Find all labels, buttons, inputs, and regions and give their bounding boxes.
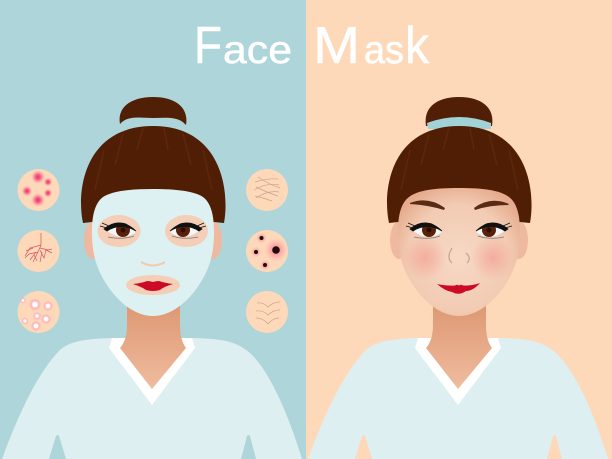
lip patch [126, 275, 180, 295]
eye left [100, 223, 136, 238]
eye left [406, 223, 442, 238]
skin problem: pimples [18, 169, 60, 211]
panel: woman without mask [308, 97, 608, 459]
blush [403, 236, 515, 280]
title: k [405, 17, 430, 75]
sleeve gap left [355, 435, 372, 459]
hair band [427, 117, 491, 129]
title: ace [223, 29, 292, 72]
skin problem: wrinkles [246, 291, 288, 333]
collar [415, 338, 501, 405]
neck [426, 300, 492, 389]
sleeve gap right [547, 435, 562, 459]
eye patches [98, 215, 208, 247]
skin problem: veins [18, 230, 60, 272]
skin problem: whiteheads [18, 291, 60, 333]
sleeve gap right [241, 435, 256, 459]
shirt [2, 338, 302, 459]
sleeve gap left [49, 435, 66, 459]
hair [387, 126, 532, 223]
face [398, 188, 520, 316]
shirt [308, 338, 608, 459]
nose [141, 262, 165, 266]
panel: peach background [306, 0, 612, 459]
skin problem: fine lines [246, 169, 288, 211]
title [194, 17, 430, 75]
hair bun [426, 97, 492, 126]
panel: blue background [0, 0, 306, 459]
eye right [476, 223, 512, 238]
collar [109, 338, 195, 405]
nose [449, 248, 469, 263]
skin problem: blackheads [246, 230, 288, 272]
mask [92, 189, 214, 316]
hair bun [120, 97, 186, 125]
eye right [170, 223, 206, 238]
lips [133, 281, 173, 291]
ears [390, 221, 528, 259]
ears [84, 221, 222, 259]
hair [81, 126, 226, 223]
neck [120, 300, 186, 389]
eyebrows [410, 200, 509, 210]
title: F [194, 17, 222, 75]
panel: woman with face mask [2, 97, 302, 459]
title: M [313, 17, 360, 75]
title: as [364, 29, 404, 72]
lips [437, 283, 480, 294]
